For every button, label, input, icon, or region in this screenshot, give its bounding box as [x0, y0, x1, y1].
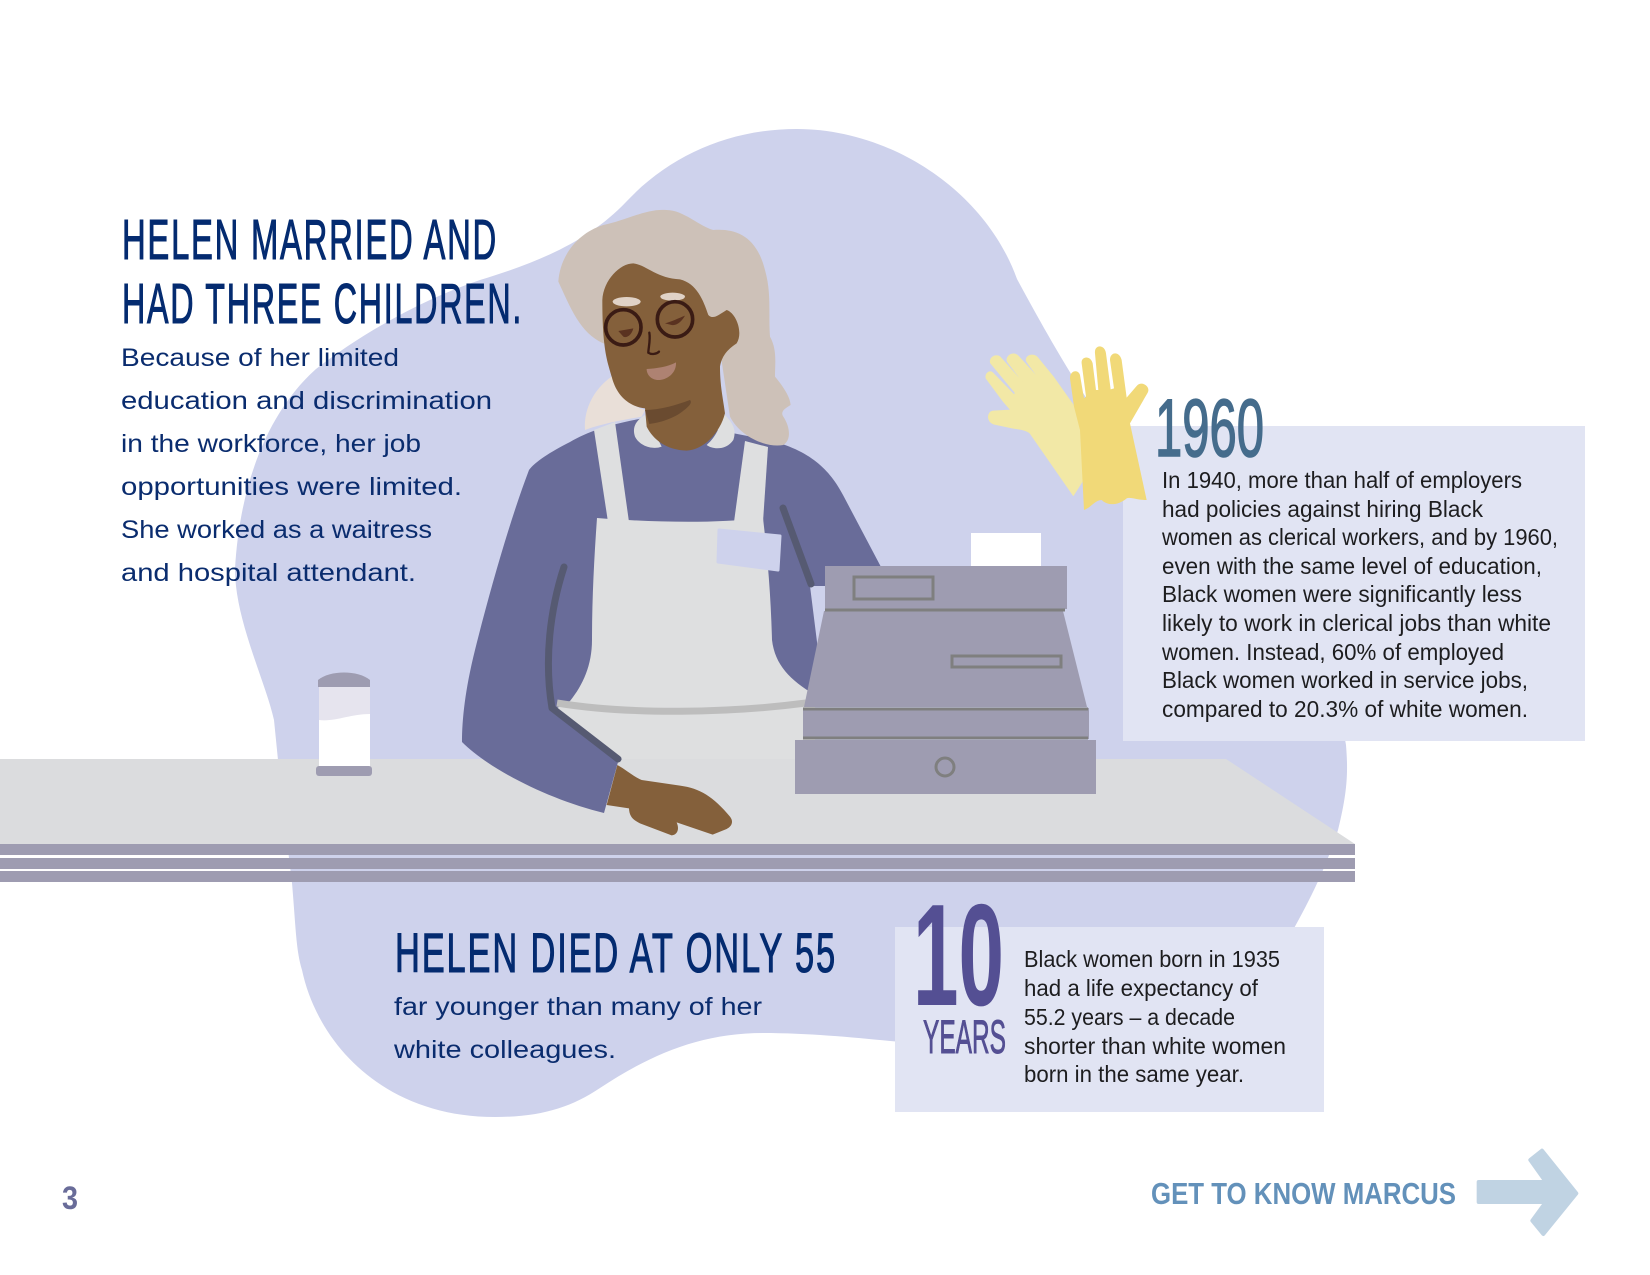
- text block: 1960 note: women. Instead, 60% of employed: [1161, 639, 1504, 665]
- panel: 1960 statistics box: [1123, 426, 1585, 741]
- text block: life expectancy note: 55.2 years – a decade: [1024, 1004, 1235, 1030]
- shoulder: [585, 377, 645, 430]
- receipt: [971, 533, 1041, 566]
- text block: limited opportunities: and hospital attendant.: [121, 559, 416, 587]
- text block: life expectancy note: [1024, 946, 1286, 1087]
- page number: 3: [62, 1180, 78, 1216]
- counter edge stripes: [0, 844, 1355, 882]
- text block: 1960 note: [1161, 467, 1558, 722]
- text block: limited opportunities: [121, 344, 492, 587]
- hand: [607, 765, 732, 835]
- eyes and nose: [618, 316, 685, 354]
- next page link text: GET TO KNOW MARCUS: [1151, 1176, 1456, 1211]
- arrow: next page: [1479, 1151, 1576, 1234]
- text block: limited opportunities: opportunities were limited.: [121, 473, 462, 501]
- neck shadow: [645, 400, 691, 424]
- text block: limited opportunities: Because of her limited: [121, 344, 399, 372]
- text block: 1960 note: had policies against hiring Black: [1162, 496, 1483, 522]
- icon: salt shaker: [316, 672, 372, 776]
- text block: life expectancy note: born in the same year.: [1024, 1061, 1244, 1087]
- head: [558, 210, 791, 451]
- glasses: [606, 302, 693, 345]
- right glove: [1070, 346, 1148, 510]
- big number: 10: 10: [913, 874, 1004, 1036]
- text block: 1960 note: Black women worked in service jobs,: [1162, 667, 1528, 693]
- apron: [557, 422, 815, 759]
- text block: 1960 note: women as clerical workers, and by 1960,: [1161, 524, 1558, 550]
- heading: Helen married: HAD THREE CHILDREN.: [122, 272, 523, 336]
- text block: younger than colleagues: far younger than many of her: [394, 993, 762, 1021]
- panel: life expectancy box: [895, 927, 1324, 1112]
- sweater: [462, 417, 881, 813]
- heading: Helen died: HELEN DIED AT ONLY 55: [395, 921, 837, 984]
- sleeve seams: [548, 508, 811, 759]
- text block: limited opportunities: She worked as a waitress: [121, 516, 432, 544]
- name tag: [718, 530, 780, 570]
- text block: limited opportunities: education and discrimination: [121, 387, 492, 415]
- eyebrows: [613, 293, 685, 306]
- text block: life expectancy note: Black women born in 1935: [1024, 946, 1280, 972]
- text block: 1960 note: compared to 20.3% of white women.: [1162, 696, 1528, 722]
- heading: 1960: 1960: [1155, 383, 1264, 474]
- text block: 1960 note: In 1940, more than half of employers: [1162, 467, 1522, 493]
- text block: younger than colleagues: [393, 993, 762, 1064]
- heading: Helen married: [122, 208, 523, 336]
- hair: [558, 210, 791, 446]
- text block: 1960 note: even with the same level of education,: [1162, 553, 1542, 579]
- apron waist band: [557, 703, 806, 711]
- left glove: [986, 354, 1083, 496]
- background blob: [235, 129, 1347, 1117]
- text block: 1960 note: Black women were significantly less: [1162, 581, 1522, 607]
- collar: [634, 413, 735, 448]
- text block: 1960 note: likely to work in clerical jobs than white: [1162, 610, 1551, 636]
- heading: Helen married: HELEN MARRIED AND: [122, 208, 498, 272]
- icon: rubber gloves: [986, 346, 1148, 510]
- label: years: YEARS: [923, 1010, 1006, 1063]
- counter top: [0, 759, 1355, 844]
- icon: cash register: [795, 533, 1096, 794]
- text block: life expectancy note: shorter than white women: [1024, 1033, 1286, 1059]
- face: [602, 263, 739, 451]
- mouth: [647, 362, 676, 380]
- illustration: Helen the waitress: [462, 210, 885, 835]
- text block: younger than colleagues: white colleagues.: [393, 1036, 616, 1064]
- text block: limited opportunities: in the workforce, her job: [121, 430, 421, 458]
- text block: life expectancy note: had a life expectancy of: [1024, 975, 1259, 1001]
